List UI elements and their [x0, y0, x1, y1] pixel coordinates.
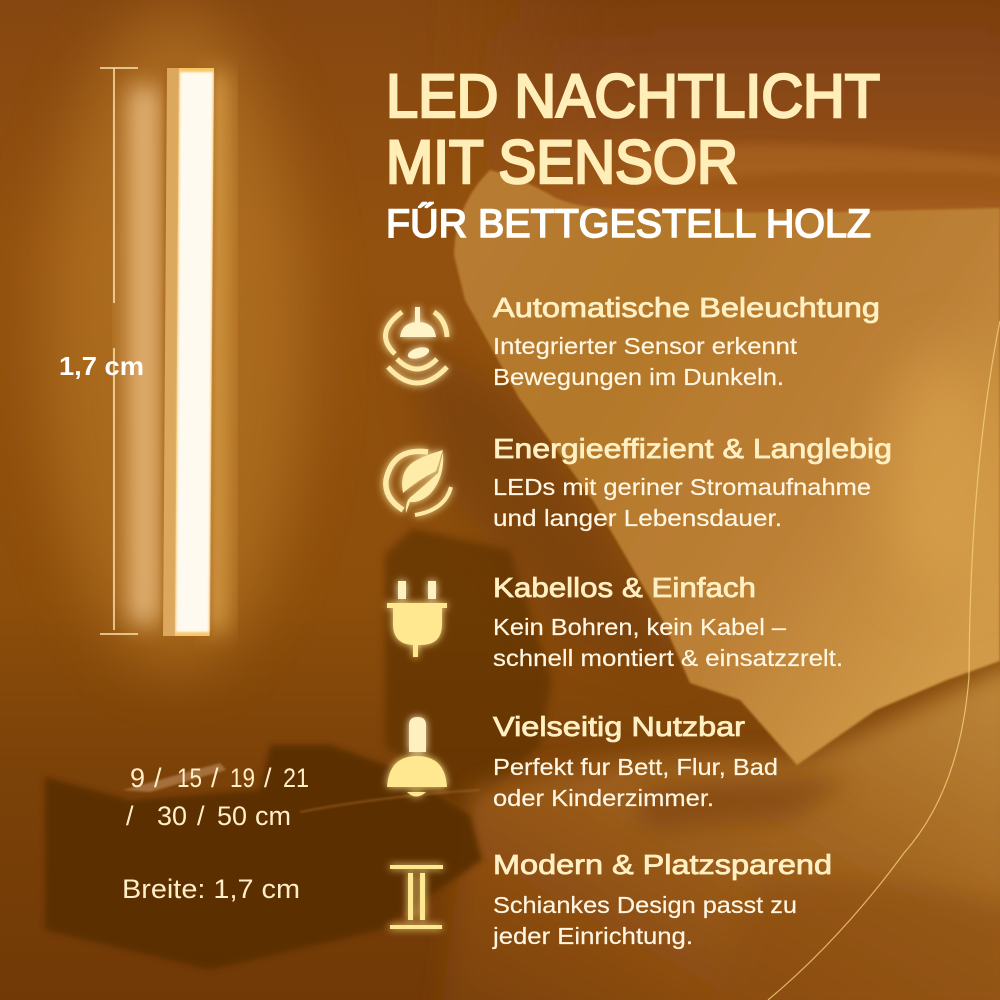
- feature: Modern: Modern & Platzsparend: [493, 849, 832, 880]
- wall glow behind light bar: [128, 85, 160, 625]
- feature: Modern: Schiankes Design passt zu: [493, 892, 797, 918]
- size list: [126, 763, 309, 831]
- icon: motion sensor lamp: [386, 307, 447, 383]
- feature: Automatische Beleuchtung: Integrierter Sensor erkennt: [493, 333, 797, 359]
- feature: Automatische Beleuchtung: [493, 292, 880, 390]
- feature: Energieeffizient: und langer Lebensdauer.: [493, 505, 782, 531]
- size list: /: [154, 763, 162, 793]
- dimension label: 1,7 cm: [59, 351, 144, 381]
- pillow shading: [885, 350, 995, 590]
- size list: 30: [157, 801, 187, 831]
- title: [386, 62, 880, 246]
- feature: Kabellos: [493, 572, 843, 671]
- icon: plug: [387, 581, 447, 657]
- feature: Kabellos: Kabellos & Einfach: [493, 572, 756, 603]
- size list: cm: [255, 801, 291, 831]
- feature: Automatische Beleuchtung: Automatische Beleuchtung: [493, 292, 880, 323]
- feature: Kabellos: Kein Bohren, kein Kabel –: [493, 614, 787, 640]
- feature: Modern: [492, 849, 832, 949]
- size list: /: [126, 801, 134, 831]
- feature: Kabellos: schnell montiert & einsatzzrelt.: [493, 645, 843, 671]
- feature: Vielseitig: [493, 711, 778, 811]
- title: LED NACHTLICHT: [386, 62, 880, 130]
- size list: 19: [230, 763, 255, 793]
- feature: Energieeffizient: LEDs mit geriner Stromaufnahme: [493, 474, 871, 500]
- icon: slim bars: [390, 865, 443, 929]
- size list: 21: [283, 763, 309, 793]
- feature: Vielseitig: oder Kinderzimmer.: [493, 785, 714, 811]
- pillow: [454, 170, 1000, 765]
- feature: Modern: jeder Einrichtung.: [492, 923, 693, 949]
- icon: leaf: [386, 450, 451, 515]
- dimension line: height: [100, 68, 138, 634]
- decorative curve line: [768, 321, 1000, 1000]
- size list: 15: [177, 763, 202, 793]
- size list: 9: [130, 763, 145, 793]
- size list: 50: [217, 801, 247, 831]
- icon: wall lamp: [387, 717, 447, 796]
- feature: Automatische Beleuchtung: Bewegungen im Dunkeln.: [493, 364, 784, 390]
- size list: /: [264, 763, 272, 793]
- title: FŰR BETTGESTELL HOLZ: [386, 201, 871, 246]
- LED light bar: [163, 68, 227, 636]
- feature: Energieeffizient: [493, 433, 892, 531]
- title: MIT SENSOR: [386, 128, 738, 196]
- size list: /: [197, 801, 205, 831]
- feature: Vielseitig: Vielseitig Nutzbar: [493, 711, 745, 742]
- feature: Energieeffizient: Energieeffizient & Langlebig: [493, 433, 892, 464]
- size list: /: [211, 763, 219, 793]
- width label: Breite: 1,7 cm: [122, 874, 300, 904]
- feature: Vielseitig: Perfekt fur Bett, Flur, Bad: [493, 754, 778, 780]
